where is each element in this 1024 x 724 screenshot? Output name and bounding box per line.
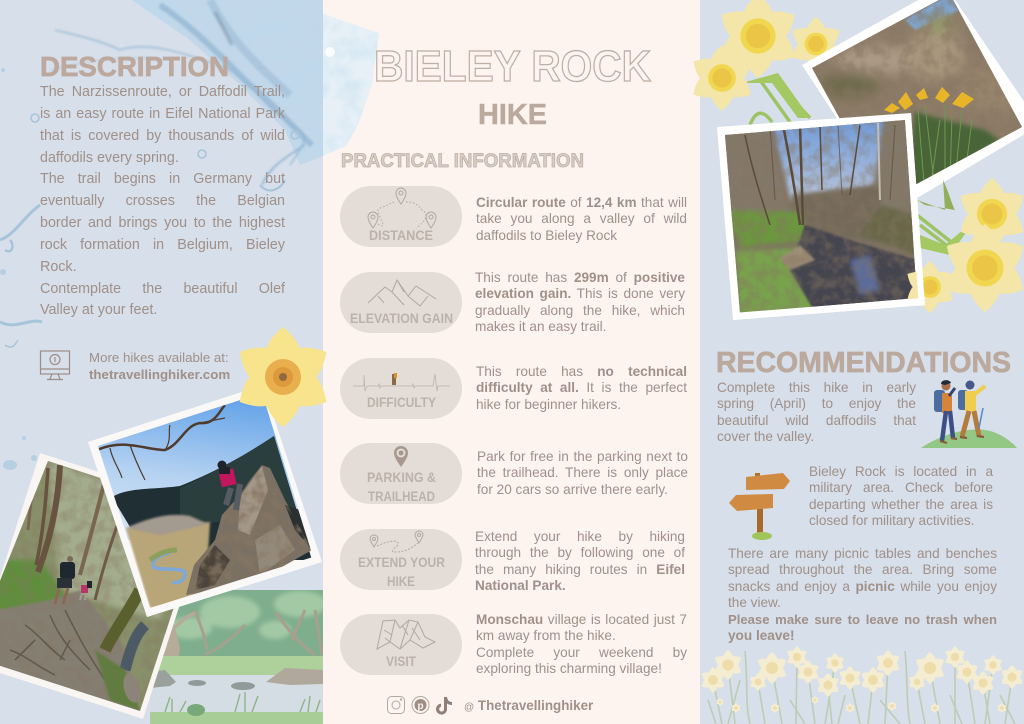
text: recommendation on picnic and trash: spread throughout the area. Bring some xyxy=(728,562,997,577)
text: distance: Circular route of 12,4 km that will xyxy=(476,195,687,210)
text: description body: Rock. xyxy=(40,259,77,275)
text: description body: The trail begins in Germany but xyxy=(40,171,285,187)
pill: extend your hike xyxy=(340,529,462,590)
text: description body: that is covered by thousands of wild xyxy=(40,128,285,144)
pill: parking and trailhead: PARKING & xyxy=(367,469,436,485)
pill: distance xyxy=(340,186,462,247)
text: recommendation on picnic and trash: snacks and enjoy a picnic while you enjoy xyxy=(728,579,997,594)
text: website link: More hikes available at: xyxy=(89,350,229,365)
text: description body: eventually crosses the Belgian xyxy=(40,193,285,209)
heading: description: DESCRIPTION xyxy=(40,51,229,82)
icon: daffodil beside website link xyxy=(231,327,335,427)
text: description body: is an easy route in Eifel National Park xyxy=(40,106,285,122)
text: visit: exploring this charming village! xyxy=(476,661,662,676)
text: distance: take you along a valley of wild xyxy=(476,211,687,226)
icons: instagram, pinterest and tiktok: p xyxy=(417,701,424,712)
subtitle: hike: HIKE xyxy=(478,99,547,131)
icon: monitor with information symbol xyxy=(40,351,70,380)
pill: extend your hike: HIKE xyxy=(387,573,415,589)
pill: visit xyxy=(340,614,462,675)
text: elevation: gradually along the hike, which xyxy=(475,303,685,318)
title: Bieley Rock: BIELEY ROCK xyxy=(374,42,651,91)
text: recommendation on season: spring (April) to enjoy the xyxy=(717,396,916,411)
text: recommendation on military area: military area. Check before xyxy=(809,480,993,495)
pill: difficulty xyxy=(340,358,462,419)
text: elevation: elevation gain. This is done very xyxy=(475,286,685,301)
flowers: top of right panel xyxy=(687,0,844,125)
text: recommendation on military area: Bieley Rock is located in a xyxy=(809,464,993,479)
text: extend: National Park. xyxy=(475,578,566,593)
text: description body xyxy=(40,84,285,318)
pill: extend your hike: EXTEND YOUR xyxy=(358,554,445,570)
text: visit: km away from the hike. xyxy=(476,628,616,643)
illustration: forest pond xyxy=(150,590,326,724)
text: description body: Contemplate the beautiful Olef xyxy=(40,281,285,297)
text: recommendation on picnic and trash: There are many picnic tables and benches xyxy=(728,546,997,561)
text: recommendation on picnic and trash: the view. xyxy=(728,595,781,610)
text: parking: for 20 cars so arrive there early. xyxy=(477,482,668,497)
text: distance: daffodils to Bieley Rock xyxy=(476,228,617,243)
text: recommendation on season: beautiful wild daffodils that xyxy=(717,413,916,428)
text: visit xyxy=(476,612,687,676)
illustration: two hikers on green hill xyxy=(921,380,1017,448)
pill: parking and trailhead xyxy=(340,443,462,504)
text: parking: the trailhead. There is only place xyxy=(477,465,688,480)
text: difficulty: This route has no technical xyxy=(476,364,687,379)
text: recommendation on military area xyxy=(809,464,994,528)
text: difficulty: difficulty at all. It is the perfect xyxy=(476,380,687,395)
text: description body: The Narzissenroute, or Daffodil Trail, xyxy=(40,84,285,100)
panel: centre background xyxy=(323,0,700,724)
text: extend: through the by following one of xyxy=(475,545,685,560)
text: description body: border and brings you to the highest xyxy=(40,215,285,231)
panel: left background xyxy=(0,0,323,724)
heading: recommendations: RECOMMENDATIONS xyxy=(716,347,1011,379)
text: extend: Extend your hike by hiking xyxy=(475,529,685,544)
text: recommendation on picnic and trash: Please make sure to leave no trash when xyxy=(728,612,997,627)
flowers: right of the photos xyxy=(733,113,1024,320)
flower strip along bottom of right panel xyxy=(699,646,1024,724)
pill: parking and trailhead: TRAILHEAD xyxy=(368,488,435,504)
pill: difficulty: DIFFICULTY xyxy=(367,394,437,410)
panel: right background xyxy=(700,0,1024,724)
water splash xyxy=(0,0,379,470)
text: recommendation on season: cover the valley. xyxy=(717,429,814,444)
text: elevation: makes it an easy trail. xyxy=(475,319,606,334)
text: recommendation on picnic and trash xyxy=(728,546,997,643)
text: recommendation on season: Complete this hike in early xyxy=(717,380,916,395)
pill: elevation gain: ELEVATION GAIN xyxy=(350,310,453,326)
text: elevation: This route has 299m of positive xyxy=(475,270,685,285)
pill: elevation gain xyxy=(340,272,462,333)
text: difficulty: hike for beginner hikers. xyxy=(476,397,621,412)
heading: practical information: PRACTICAL INFORMATION xyxy=(341,150,584,172)
text: elevation xyxy=(475,270,685,334)
text: description body: rock formation in Belgium, Bieley xyxy=(40,237,285,253)
text: parking xyxy=(477,449,688,497)
text: recommendation on picnic and trash: you leave! xyxy=(728,628,794,643)
icons: instagram, pinterest and tiktok xyxy=(388,696,452,715)
text: website link xyxy=(89,350,230,382)
photo: wild daffodils on hillside xyxy=(800,0,1024,210)
text: website link: thetravellinghiker.com xyxy=(89,366,230,382)
text: recommendation on military area: departing whether the area is xyxy=(809,497,993,512)
text: recommendation on season xyxy=(717,380,916,444)
pill: visit: VISIT xyxy=(386,653,416,669)
text: visit: Monschau village is located just 7 xyxy=(476,612,687,627)
text: description body: Valley at your feet. xyxy=(40,302,157,318)
photo: hiker on Bieley Rock xyxy=(88,385,322,617)
text: extend xyxy=(475,529,686,593)
text: difficulty xyxy=(476,364,687,412)
pill: distance: DISTANCE xyxy=(369,227,433,243)
illustration: wooden signpost xyxy=(729,473,790,540)
text: parking: Park for free in the parking next to xyxy=(477,449,688,464)
text: distance xyxy=(476,195,687,243)
photo: stream through bare woodland xyxy=(717,113,925,320)
text: description body: daffodils every spring. xyxy=(40,150,179,166)
text: extend: the many hiking routes in Eifel xyxy=(475,562,685,577)
text: recommendation on military area: closed for military activities. xyxy=(809,513,974,528)
text: visit: Complete your weekend by xyxy=(476,645,687,660)
text: social handle: @ Thetravellinghiker xyxy=(464,698,593,713)
photo: hikers on rooty forest path xyxy=(0,453,180,719)
